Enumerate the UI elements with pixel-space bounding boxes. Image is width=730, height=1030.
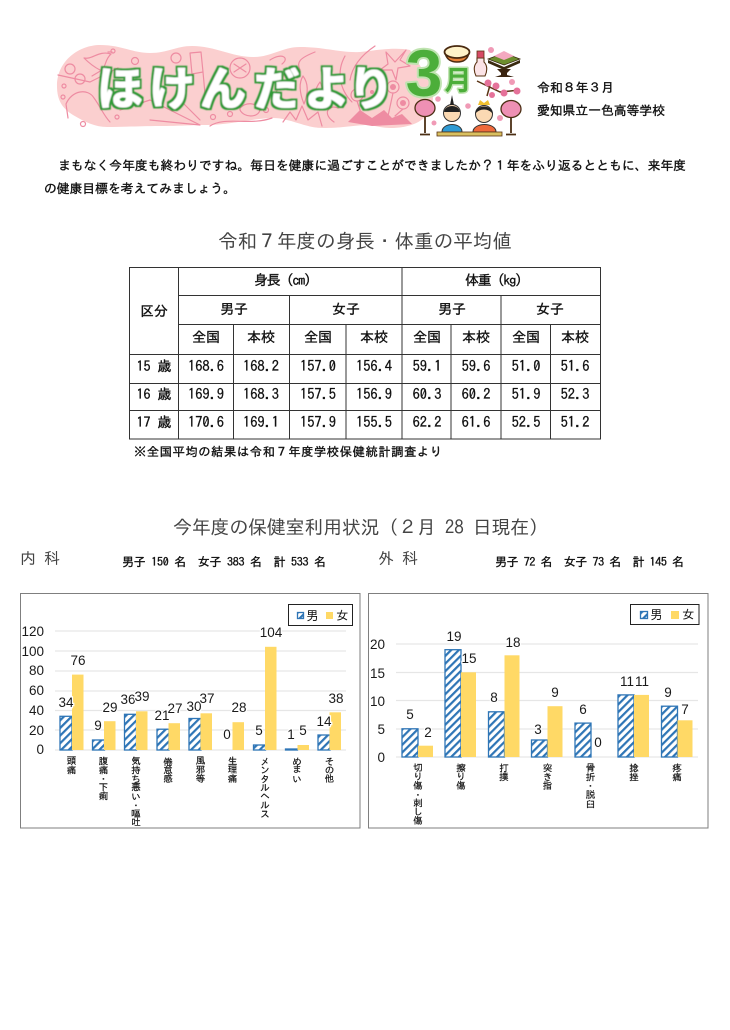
table row: 15歳: 51.6 (561, 358, 589, 373)
data labels: 1 (287, 727, 295, 742)
table row: 15歳 (136, 358, 589, 373)
table row: 17歳: 61.6 (462, 414, 490, 429)
banner title: よ (304, 53, 350, 119)
male bars (60, 714, 330, 750)
female bars (72, 647, 341, 750)
category labels: 疼痛 (671, 763, 682, 782)
table row: 16歳: 51.9 (512, 386, 540, 401)
table header: 体重（kg） (465, 272, 529, 287)
table header: 本校 (360, 329, 388, 344)
category labels: 頭痛 (66, 756, 76, 775)
data labels: 8 (490, 690, 498, 705)
data labels: 34 (58, 695, 74, 710)
banner doodles: bird, flowers, line art (58, 46, 410, 126)
data labels: 6 (579, 702, 587, 717)
data labels: 18 (505, 635, 521, 650)
data labels: 5 (255, 723, 263, 738)
surgery totals: 男子 72 名 女子 73 名 計 145 名 (495, 556, 684, 568)
data labels: 76 (70, 653, 86, 668)
data labels: 14 (316, 714, 332, 729)
table row: 17歳: 157.9 (300, 414, 336, 429)
icon: doll platform (437, 132, 502, 136)
table row: 15歳: 156.4 (356, 358, 392, 373)
category labels: 骨折・脱臼 (585, 763, 595, 808)
table header (140, 272, 589, 344)
month label: 3月: 3 (406, 36, 442, 110)
y axis labels: 15 (370, 666, 385, 681)
category labels: 擦り傷 (456, 763, 466, 791)
category labels: その他 (325, 756, 334, 783)
data labels: 9 (664, 685, 672, 700)
table header: 女子 (332, 302, 360, 316)
intro text: まもなく今年度も終わりですね。毎日を健康に過ごすことができましたか？１年をふり返るとともに、来年度 (58, 159, 686, 172)
table header: 全国 (413, 330, 441, 344)
data labels: 27 (167, 701, 183, 716)
y axis labels: 40 (29, 703, 44, 718)
data labels: 3 (534, 722, 542, 737)
table header: 区分 (140, 304, 168, 318)
table row: 16歳: 60.3 (413, 386, 441, 401)
table header: 本校 (561, 329, 589, 344)
table row: 15歳: 15 歳 (136, 359, 172, 373)
table header: 男子 (220, 302, 248, 316)
heading: height and weight averages: 令和７年度の身長・体重の平均値 (218, 231, 512, 251)
table row: 15歳: 168.2 (243, 358, 279, 373)
table row: 17歳: 17 歳 (136, 415, 172, 429)
month label: 3月 (406, 36, 472, 110)
table row: 16歳: 156.9 (356, 386, 392, 401)
table header: 身長（cm） (254, 273, 318, 287)
category labels: 腹痛・下痢 (98, 756, 108, 802)
category labels: 生理痛 (227, 756, 237, 784)
banner: pink wavy background (57, 45, 433, 128)
banner title: だ (254, 53, 300, 119)
intro text (44, 159, 686, 195)
table row: 15歳: 157.0 (300, 358, 336, 373)
data labels: 0 (594, 735, 602, 750)
legend: 男 (650, 608, 662, 621)
legend (630, 604, 699, 624)
table row: 15歳: 51.0 (512, 358, 540, 373)
category labels (66, 756, 334, 826)
masthead banner (57, 36, 521, 136)
data labels: 36 (120, 692, 136, 707)
table row: 16歳: 168.3 (243, 386, 279, 401)
table row: 15歳: 168.6 (188, 358, 224, 373)
table header: 本校 (247, 329, 275, 344)
intro text: の健康目標を考えてみましょう。 (44, 182, 236, 195)
bar chart: internal medicine visits (20, 594, 360, 828)
table row: 16歳: 60.2 (462, 386, 490, 401)
category labels: 捻挫 (629, 763, 638, 781)
data labels: 29 (102, 700, 118, 715)
data labels: 21 (154, 708, 170, 723)
table header: 全国 (512, 330, 540, 344)
category labels: 切り傷・刺し傷 (413, 763, 422, 826)
data labels (406, 629, 689, 750)
y axis labels (21, 624, 44, 757)
table header: 全国 (192, 330, 220, 344)
y axis labels: 0 (36, 742, 44, 757)
data labels: 38 (328, 691, 344, 706)
category labels: 打撲 (499, 763, 508, 782)
icon: hishimochi stand (488, 47, 520, 77)
y axis labels: 100 (21, 644, 44, 659)
internal medicine totals: 男子 150 名 女子 383 名 計 533 名 (122, 556, 326, 568)
table row: 17歳: 62.2 (413, 414, 441, 429)
legend: 女 (336, 609, 348, 622)
female bars (418, 655, 692, 757)
table row: 17歳: 170.6 (188, 414, 224, 429)
data labels: 9 (94, 718, 102, 733)
y axis labels (370, 637, 385, 765)
data labels: 37 (199, 691, 215, 706)
data labels: 104 (260, 625, 283, 640)
table: height and weight (129, 267, 600, 439)
banner title: り (348, 53, 394, 119)
date and school name (537, 81, 665, 117)
table row: 17歳: 155.5 (356, 414, 392, 429)
category labels (413, 763, 682, 826)
data labels: 30 (186, 699, 202, 714)
icon: emperor doll (442, 95, 462, 132)
label: surgery: 外 科 (378, 550, 418, 566)
data labels: 9 (551, 685, 559, 700)
heading: health room usage: 今年度の保健室利用状況（２月 28 日現在） (173, 517, 548, 537)
data labels (58, 625, 344, 742)
table row: 17歳: 51.2 (561, 414, 589, 429)
legend: 男 (306, 609, 318, 622)
table header: 男子 (438, 302, 466, 316)
table header: 女子 (536, 302, 564, 316)
table row: 16歳: 169.9 (188, 386, 224, 401)
y axis labels: 20 (29, 723, 44, 738)
table row: 15歳: 59.1 (413, 358, 441, 373)
male bars (402, 650, 678, 757)
data labels: 5 (406, 707, 414, 722)
table header: 本校 (462, 329, 490, 344)
banner title: ん (200, 53, 246, 119)
y axis labels: 5 (377, 722, 385, 737)
banner ground plants filled pink (348, 84, 412, 126)
y axis labels: 80 (29, 663, 44, 678)
month label: 3月: 月 (444, 59, 472, 98)
category labels: めまい (292, 756, 302, 783)
icon: left lantern (415, 100, 435, 134)
category labels: 倦怠感 (162, 756, 172, 783)
date and school name: 愛知県立一色高等学校 (537, 103, 665, 117)
banner title (97, 53, 394, 119)
y axis labels: 0 (377, 750, 385, 765)
icon: right lantern (501, 100, 521, 134)
table row: 17歳: 169.1 (243, 414, 279, 429)
table row: 17歳: 52.5 (512, 414, 540, 429)
data labels: 11 (635, 674, 649, 689)
table row: 16歳: 52.3 (561, 386, 589, 401)
category labels: 風邪等 (195, 756, 205, 783)
data labels: 28 (231, 700, 247, 715)
table row: 16歳: 16 歳 (136, 387, 172, 401)
legend: 女 (682, 608, 694, 621)
data labels: 5 (299, 723, 307, 738)
data labels: 39 (134, 689, 150, 704)
legend (288, 604, 352, 626)
data labels: 15 (461, 651, 477, 666)
date and school name: 令和８年３月 (537, 81, 614, 94)
y axis labels: 10 (370, 694, 385, 709)
table row: 17歳 (136, 414, 589, 429)
icon: sake bottle (474, 51, 487, 76)
data labels: 7 (681, 702, 689, 717)
icon: empress doll (473, 100, 496, 132)
banner title: ほ (97, 53, 143, 119)
banner title: け (149, 53, 195, 119)
table footnote: ※全国平均の結果は令和７年度学校保健統計調査より (134, 445, 442, 458)
icon: soup bowl (444, 46, 470, 62)
data labels: 0 (223, 727, 231, 742)
y axis labels: 120 (21, 624, 44, 639)
category labels: 突き指 (542, 763, 552, 790)
bar chart: surgery visits (368, 594, 708, 828)
category labels: 気持ち悪い・嘔吐 (130, 756, 140, 826)
table row: 15歳: 59.6 (462, 358, 490, 373)
table row: 16歳: 157.5 (300, 386, 336, 401)
table row: 16歳 (136, 386, 589, 401)
y axis labels: 60 (29, 683, 44, 698)
data labels: 11 (620, 674, 634, 689)
data labels: 19 (446, 629, 462, 644)
table header: 全国 (304, 330, 332, 344)
category labels: メンタルヘルス (260, 756, 270, 818)
icon: peach blossom branch (432, 79, 520, 126)
y axis labels: 20 (370, 637, 385, 652)
label: internal medicine: 内 科 (20, 550, 60, 566)
data labels: 2 (424, 725, 432, 740)
